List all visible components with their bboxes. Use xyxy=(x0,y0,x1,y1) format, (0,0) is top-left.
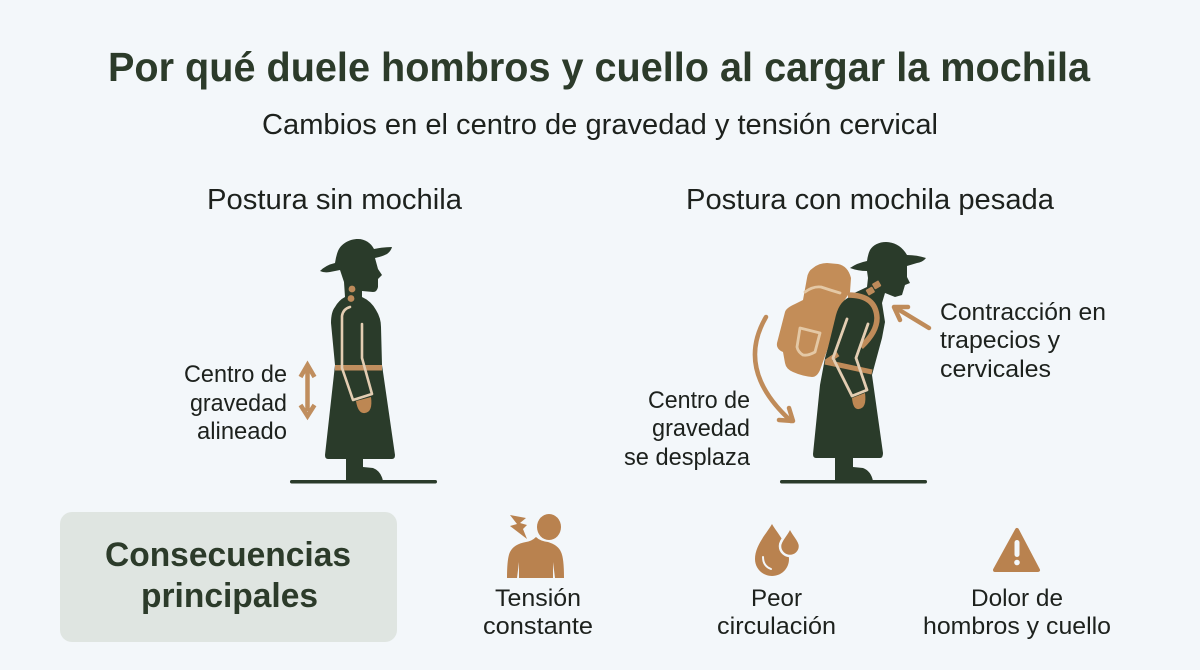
figure: standing person without backpack xyxy=(290,239,437,484)
label: constant tension: constante xyxy=(483,613,593,640)
shoulder strap and waist belt xyxy=(848,295,877,347)
heading: posture with heavy backpack: Postura con mochila pesada xyxy=(686,184,1055,216)
neck vertebrae xyxy=(865,280,882,296)
heading: posture without backpack: Postura sin mochila xyxy=(207,184,463,216)
neck vertebrae xyxy=(348,286,355,302)
upper arm over backpack xyxy=(825,296,872,372)
label: contraction in trapezius and cervical muscles: trapecios y xyxy=(940,327,1061,354)
label: contraction in trapezius and cervical muscles xyxy=(940,299,1106,383)
label: centre of gravity shifts: se desplaza xyxy=(624,444,750,471)
label: shoulder and neck pain xyxy=(923,585,1111,640)
arrow: aligned centre of gravity xyxy=(300,365,314,416)
label: shoulder and neck pain: hombros y cuello xyxy=(923,613,1111,640)
icon: neck tension xyxy=(507,514,564,578)
panel: main consequences: Consecuencias xyxy=(105,536,351,574)
label: shoulder and neck pain: Dolor de xyxy=(971,585,1063,612)
waist belt xyxy=(335,365,382,370)
backpack xyxy=(777,263,851,377)
hand xyxy=(852,393,865,409)
label: constant tension xyxy=(483,585,593,640)
arrow: centre of gravity shifts xyxy=(755,317,793,421)
label: worse circulation xyxy=(717,585,836,640)
figure: leaning person with backpack xyxy=(777,242,927,484)
icon: drops xyxy=(755,524,800,576)
panel: main consequences xyxy=(60,512,397,642)
label: centre of gravity shifts: Centro de xyxy=(648,387,750,414)
title: Por qué duele hombros y cuello al cargar la mochila xyxy=(108,44,1091,90)
label: contraction in trapezius and cervical muscles: cervicales xyxy=(940,356,1051,383)
label: aligned centre of gravity: alineado xyxy=(197,418,287,445)
subtitle: Cambios en el centro de gravedad y tensión cervical xyxy=(262,109,938,141)
hand xyxy=(356,397,371,413)
panel: main consequences: principales xyxy=(141,577,318,615)
label: worse circulation: Peor xyxy=(751,585,802,612)
arm outline xyxy=(833,319,868,396)
label: centre of gravity shifts xyxy=(624,387,750,471)
arm outline xyxy=(342,307,372,400)
label: constant tension: Tensión xyxy=(495,585,581,612)
label: aligned centre of gravity: gravedad xyxy=(190,390,287,417)
label: contraction in trapezius and cervical muscles: Contracción en xyxy=(940,299,1106,326)
icon: warning triangle xyxy=(995,530,1038,570)
label: centre of gravity shifts: gravedad xyxy=(652,415,750,442)
label: worse circulation: circulación xyxy=(717,613,836,640)
arrow: contraction xyxy=(894,307,929,328)
label: aligned centre of gravity xyxy=(184,361,287,445)
label: aligned centre of gravity: Centro de xyxy=(184,361,287,388)
